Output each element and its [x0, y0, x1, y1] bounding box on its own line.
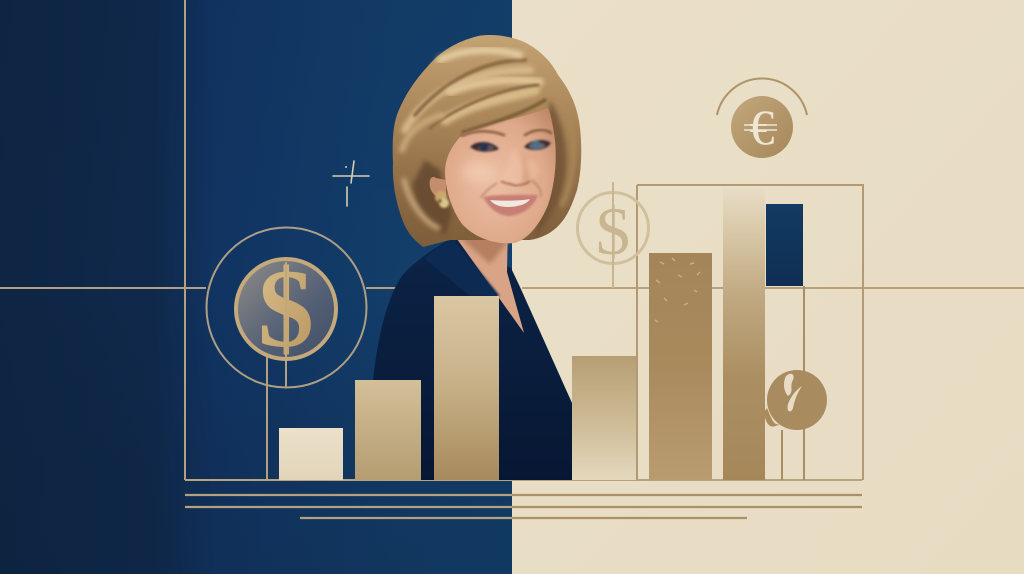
eyes	[470, 140, 551, 152]
earring	[435, 191, 449, 208]
jacket	[373, 237, 572, 480]
bar 3	[434, 296, 499, 480]
icon: left dollar coin: $	[258, 247, 314, 371]
bar 5	[649, 253, 712, 480]
nose	[501, 148, 530, 186]
icon: euro coin with arc	[717, 79, 807, 158]
hair strands	[402, 50, 573, 228]
bar chart: left bars	[279, 296, 499, 480]
icon: globe coin	[764, 370, 827, 430]
mouth	[483, 195, 538, 216]
cheek highlights	[461, 161, 495, 183]
bar 4	[572, 356, 636, 480]
panel: cream right background	[512, 0, 1024, 574]
brows	[462, 130, 551, 136]
hair shadow left	[412, 160, 452, 235]
icon: left dollar coin	[206, 228, 366, 388]
neck and chest	[452, 222, 524, 333]
icon: right dollar ring	[578, 182, 648, 288]
face	[445, 108, 556, 243]
panel: navy left background	[0, 0, 512, 574]
hair back	[393, 35, 581, 247]
icon: sparkle cross	[333, 161, 369, 206]
icon: euro coin with arc: €	[750, 99, 774, 155]
bar 1	[279, 428, 343, 480]
portrait	[373, 35, 581, 480]
bar 6	[723, 188, 765, 480]
smile creases	[481, 180, 541, 198]
hair shadow right	[535, 100, 566, 238]
bar chart: right bars	[572, 188, 803, 480]
icon: right dollar ring: $	[596, 193, 630, 269]
ear	[430, 177, 446, 197]
navy bar	[766, 204, 803, 286]
baseline rules	[185, 495, 862, 518]
bar 2	[355, 380, 421, 480]
lapel shading	[424, 238, 500, 296]
